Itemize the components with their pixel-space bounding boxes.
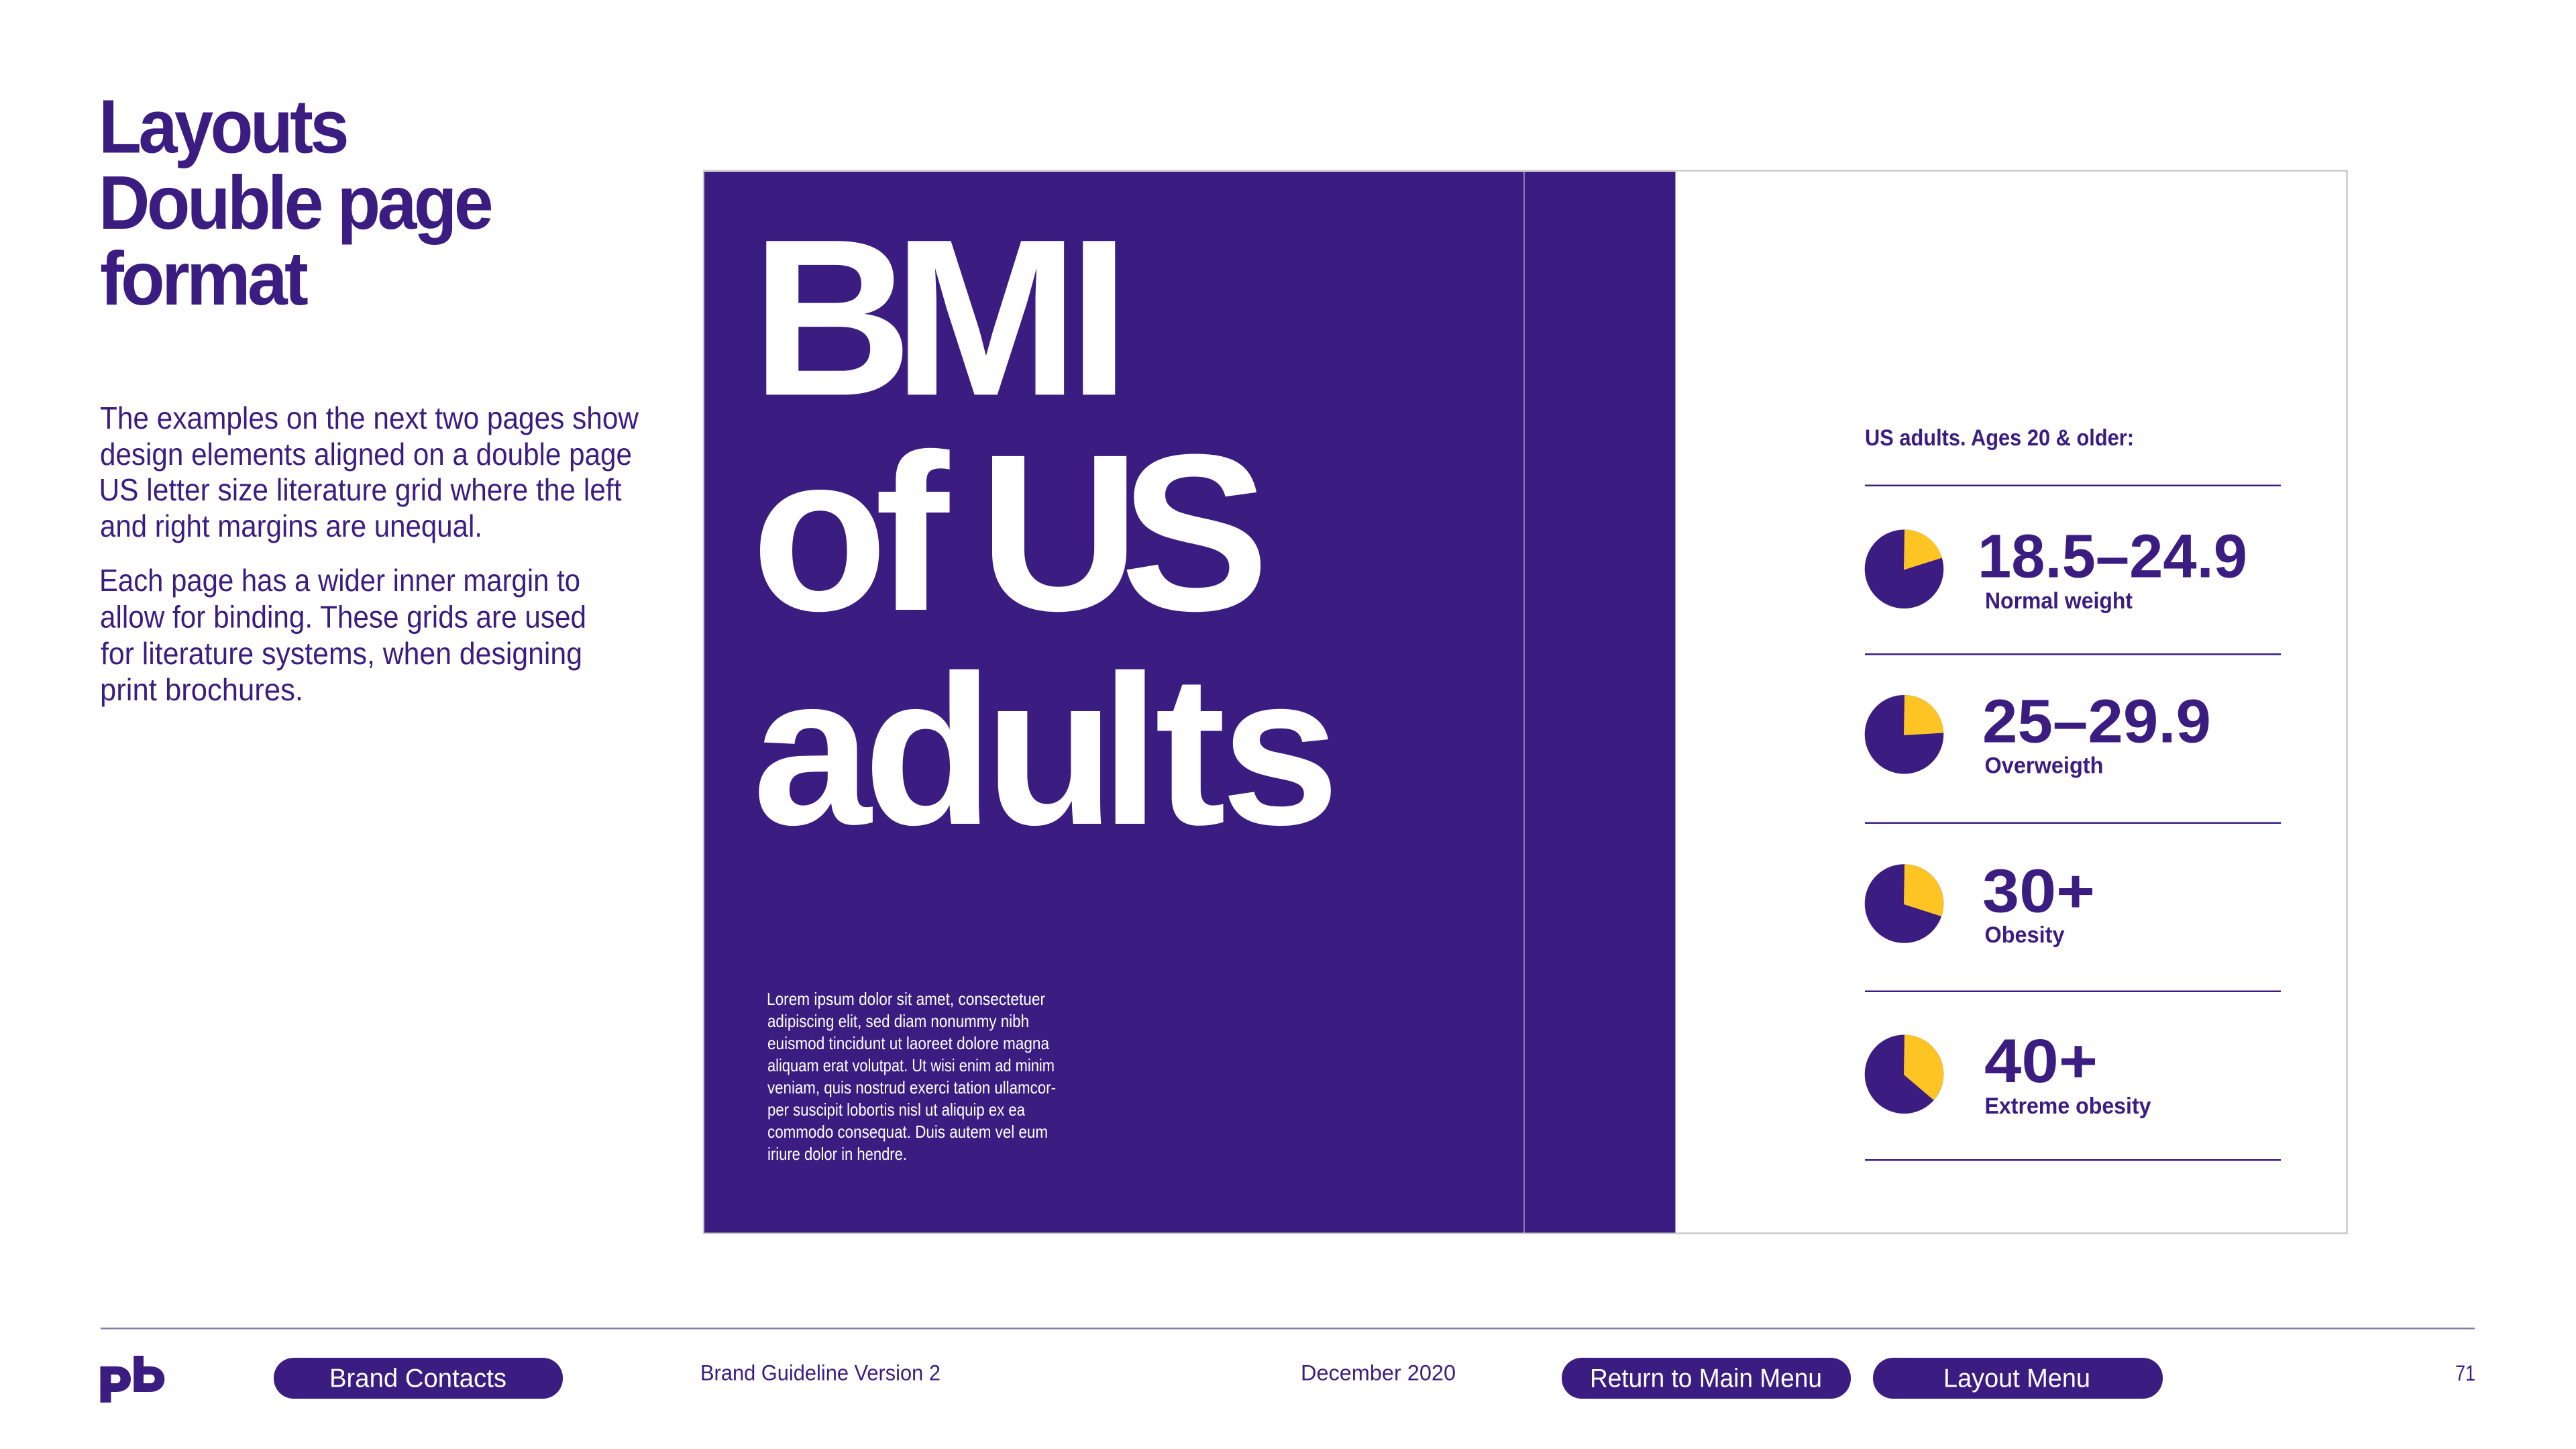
stats heading: US adults. Ages 20 & older: <box>1865 425 2134 451</box>
title: format <box>100 236 308 321</box>
label: normal weight: Normal weight <box>1985 588 2133 614</box>
icon: pie extreme obesity <box>1865 1034 1943 1114</box>
stat: overweight <box>1865 688 2211 779</box>
text block: lorem ipsum: adipiscing elit, sed diam nonummy nibh <box>767 1011 1029 1031</box>
headline: BMI of US adults: adults <box>753 631 1340 869</box>
text block: intro paragraphs: allow for binding. These grids are used <box>100 600 586 635</box>
text block: lorem ipsum: Lorem ipsum dolor sit amet, consectetuer <box>767 989 1045 1009</box>
text block: intro paragraphs: design elements aligned on a double page <box>100 437 632 472</box>
title: Double page <box>99 160 491 245</box>
page number: 71 <box>2455 1361 2475 1385</box>
stat: normal weight <box>1865 522 2247 614</box>
text block: lorem ipsum <box>767 989 1056 1164</box>
panel: left purple page <box>704 172 1676 1233</box>
text block: intro paragraphs: Each page has a wider inner margin to <box>99 563 580 598</box>
text block: intro paragraphs <box>99 400 639 707</box>
panel: right page stats <box>1865 425 2281 1161</box>
text block: intro paragraphs: print brochures. <box>100 672 303 707</box>
button: layout menu <box>1873 1358 2163 1399</box>
title: Layouts <box>99 85 347 169</box>
value: 30+: 30+ <box>1982 857 2095 926</box>
text block: lorem ipsum: aliquam erat volutpat. Ut wisi enim ad minim <box>767 1055 1055 1075</box>
button: return to main menu <box>1562 1358 1851 1399</box>
stat: extreme obesity <box>1865 1027 2151 1119</box>
button: return to main menu: Return to Main Menu <box>1590 1364 1822 1393</box>
label: extreme obesity: Extreme obesity <box>1984 1093 2151 1119</box>
text block: intro paragraphs: The examples on the next two pages show <box>100 400 639 435</box>
value: 18.5–24.9: 18.5–24.9 <box>1978 522 2247 590</box>
text block: lorem ipsum: commodo consequat. Duis autem vel eum <box>767 1122 1048 1142</box>
label: overweigth: Overweigth <box>1984 753 2104 779</box>
value: 40+: 40+ <box>1984 1027 2098 1095</box>
headline: BMI of US adults: of US <box>751 408 1269 657</box>
text block: lorem ipsum: veniam, quis nostrud exerci tation ullamcor- <box>767 1077 1056 1097</box>
footer <box>101 1328 2475 1403</box>
button: layout menu: Layout Menu <box>1943 1364 2090 1393</box>
label: obesity: Obesity <box>1984 922 2065 948</box>
text block: lorem ipsum: euismod tincidunt ut laoreet dolore magna <box>767 1033 1049 1053</box>
title <box>99 85 491 321</box>
text block: lorem ipsum: per suscipit lobortis nisl ut aliquip ex ea <box>767 1099 1025 1120</box>
button: brand contacts: Brand Contacts <box>329 1364 506 1393</box>
text block: intro paragraphs: US letter size literature grid where the left <box>99 472 622 507</box>
text block: intro paragraphs: and right margins are unequal. <box>100 508 482 543</box>
headline: BMI of US adults: BMI <box>751 193 1130 442</box>
icon: pie overweight <box>1865 695 1943 774</box>
panel: double page spread <box>704 170 2347 1233</box>
value: 25–29.9: 25–29.9 <box>1982 688 2211 756</box>
icon: pie normal weight <box>1865 530 1943 608</box>
headline: BMI of US adults <box>751 193 1340 869</box>
footer text: date: December 2020 <box>1301 1361 1456 1385</box>
icon: pb logo <box>101 1356 164 1403</box>
stat: obesity <box>1865 857 2095 948</box>
button: brand contacts <box>274 1358 563 1399</box>
text block: lorem ipsum: iriure dolor in hendre. <box>767 1144 907 1164</box>
icon: pie obesity <box>1865 864 1943 943</box>
text block: intro paragraphs: for literature systems, when designing <box>101 636 582 671</box>
footer text: version: Brand Guideline Version 2 <box>700 1361 941 1385</box>
